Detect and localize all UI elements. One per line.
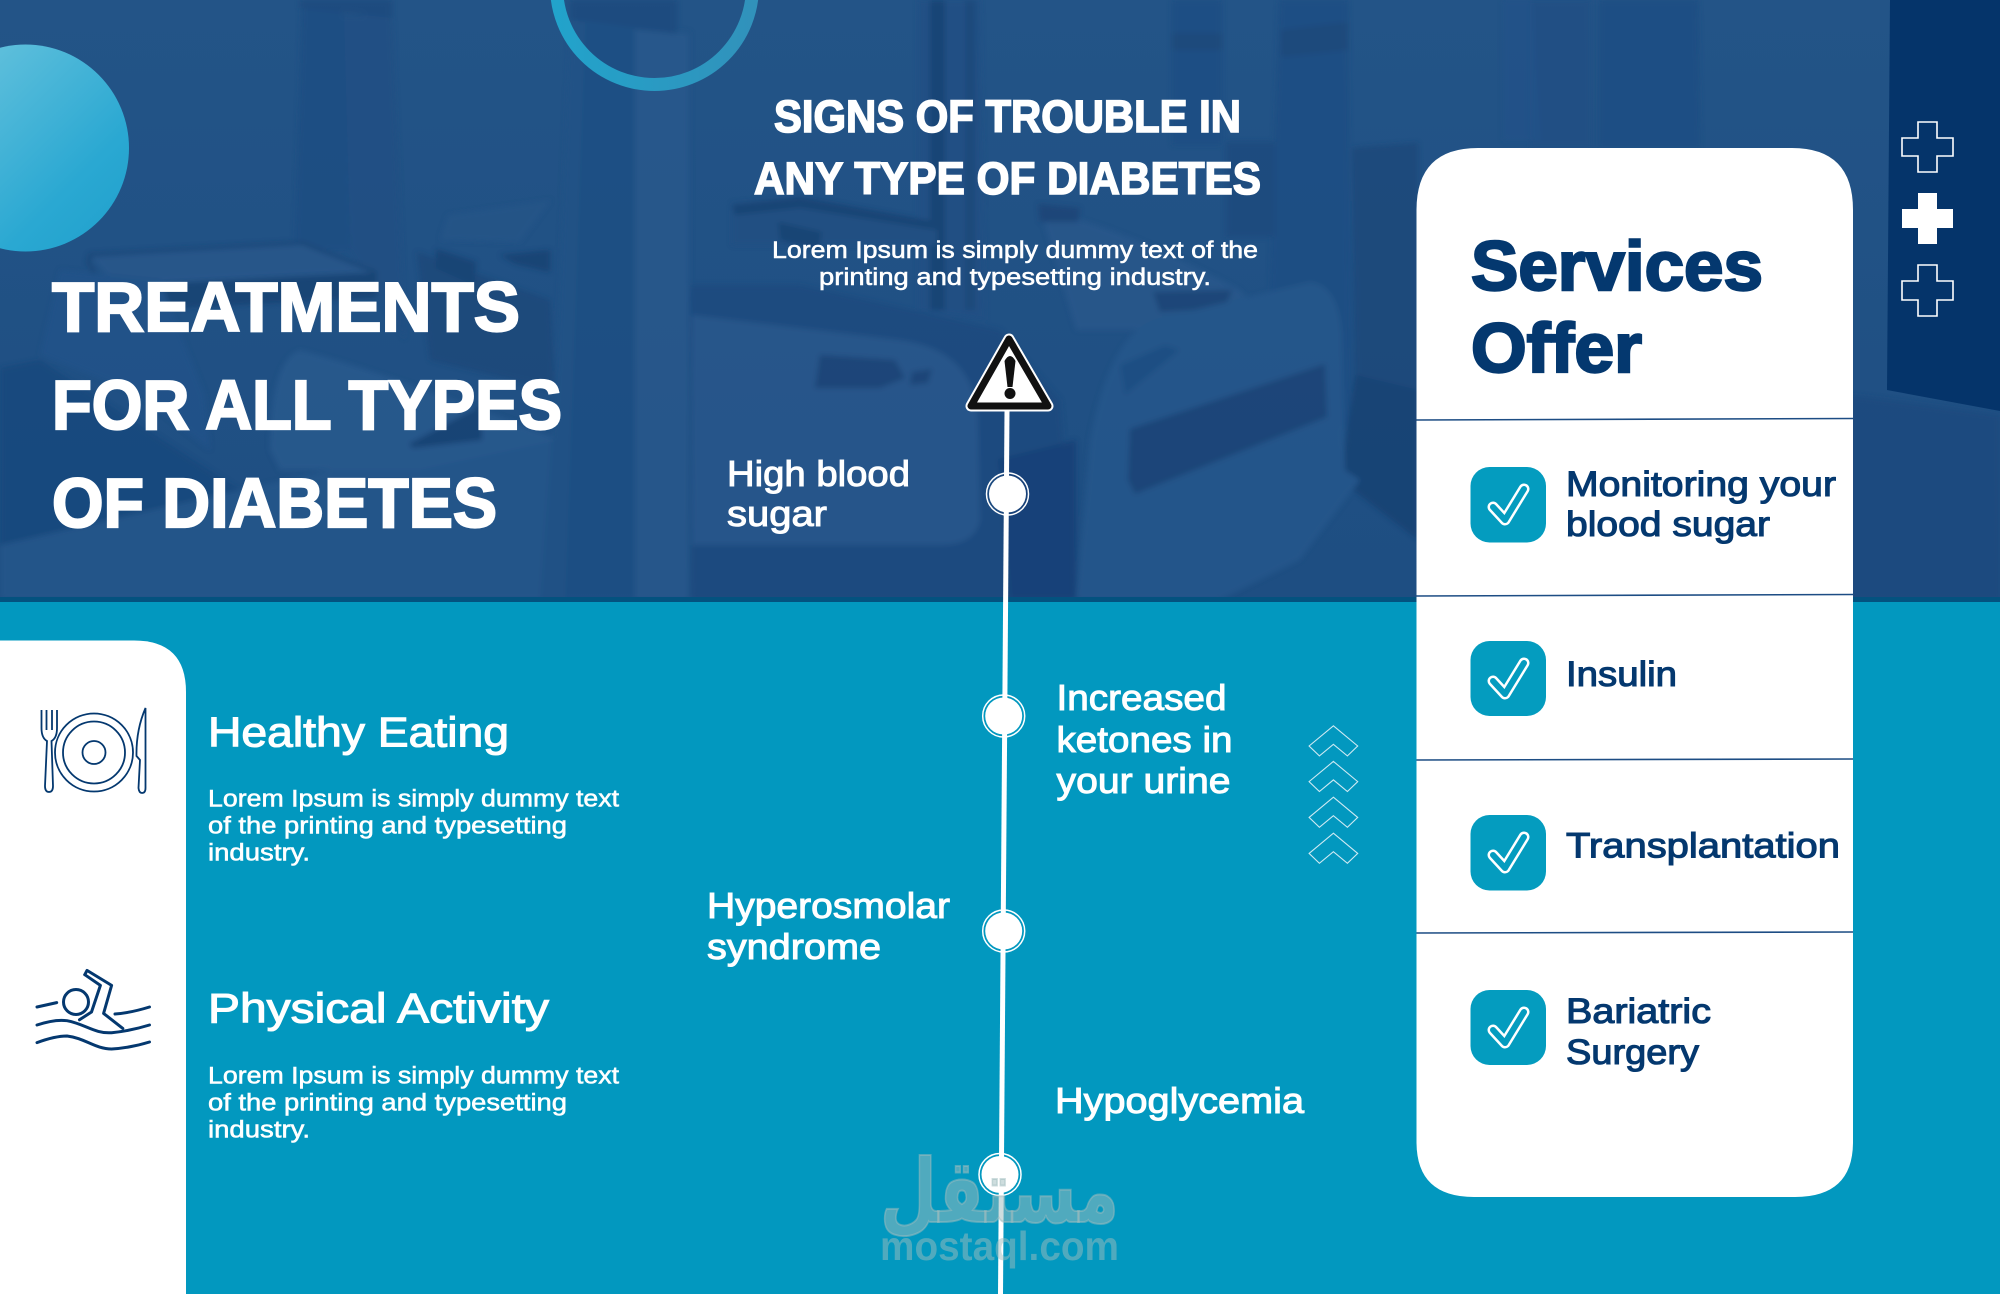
node 3 [983,910,1025,952]
intro text: Lorem Ipsum is simply dummy text of the [772,237,1258,264]
node 4 [979,1154,1021,1196]
item: bariatric surgery [1566,992,1711,1072]
heading: signs of trouble: ANY TYPE OF DIABETES [754,153,1261,204]
heading: signs of trouble [754,91,1261,204]
label: hyperosmolar syndrome: syndrome [707,926,881,967]
block: physical activity: of the printing and typesetting [208,1090,567,1116]
block: physical activity: Physical Activity [208,984,549,1032]
check: monitoring [1470,467,1546,542]
block: healthy eating: industry. [208,840,310,866]
panel: left white icon column [0,640,186,1294]
item: bariatric surgery: Surgery [1566,1033,1700,1072]
right dark strip [1887,0,2000,411]
timeline labels [707,453,1305,1121]
label: increased ketones: ketones in [1056,719,1232,760]
title: TREATMENTS [52,268,520,346]
block: healthy eating: Lorem Ipsum is simply dummy text [208,786,619,812]
services heading: Services [1471,227,1763,305]
block: physical activity: Lorem Ipsum is simply dummy text [208,1062,619,1090]
services heading [1471,227,1763,387]
check: insulin [1470,641,1546,716]
block: healthy eating: of the printing and typesetting [208,812,567,840]
item: transplantation: Transplantation [1566,826,1840,866]
bottom teal section [0,597,2000,1294]
label: high blood sugar [727,453,910,534]
label: high blood sugar: sugar [727,493,827,534]
node 2 [983,695,1025,737]
item: monitoring your blood sugar: Monitoring your [1566,465,1836,504]
watermark: mostaql: مستقل [880,1140,1119,1243]
block: physical activity: industry. [208,1116,310,1144]
watermark: mostaql [880,1140,1119,1269]
label: hypoglycemia: Hypoglycemia [1055,1080,1305,1121]
check: bariatric surgery [1470,990,1546,1065]
icon: crosses [1902,122,1953,316]
services heading: Offer [1471,309,1642,387]
intro text [772,237,1258,291]
panel: services offer [1416,148,1853,1197]
icon: chevrons [1309,726,1358,863]
item: insulin: Insulin [1566,655,1677,694]
watermark: mostaql: mostaql.com [880,1223,1119,1269]
heading: signs of trouble: SIGNS OF TROUBLE IN [774,91,1241,142]
label: high blood sugar: High blood [727,453,910,494]
title: FOR ALL TYPES [52,366,562,444]
label: increased ketones: your urine [1056,760,1230,801]
title [52,268,562,542]
decorative ring [556,0,752,84]
block: healthy eating: Healthy Eating [208,708,509,756]
label: hyperosmolar syndrome [707,885,950,967]
check: transplantation [1470,815,1546,890]
intro text: printing and typesetting industry. [819,264,1211,291]
item: monitoring your blood sugar [1566,465,1836,544]
label: hyperosmolar syndrome: Hyperosmolar [707,885,950,926]
item: bariatric surgery: Bariatric [1566,992,1711,1031]
label: increased ketones: Increased [1056,677,1226,718]
icon: plate and cutlery [42,708,146,793]
timeline [979,411,1028,1294]
node 1 [986,473,1028,515]
decorative gradient disc [0,44,129,252]
title: OF DIABETES [52,464,497,542]
icon: warning triangle [971,339,1048,406]
block: healthy eating [208,708,619,866]
label: increased ketones [1056,677,1232,801]
block: physical activity [208,984,619,1144]
item: monitoring your blood sugar: blood sugar [1566,505,1770,544]
background: hospital room photo with blue overlay [0,0,2000,600]
icon: swimmer [37,970,150,1049]
